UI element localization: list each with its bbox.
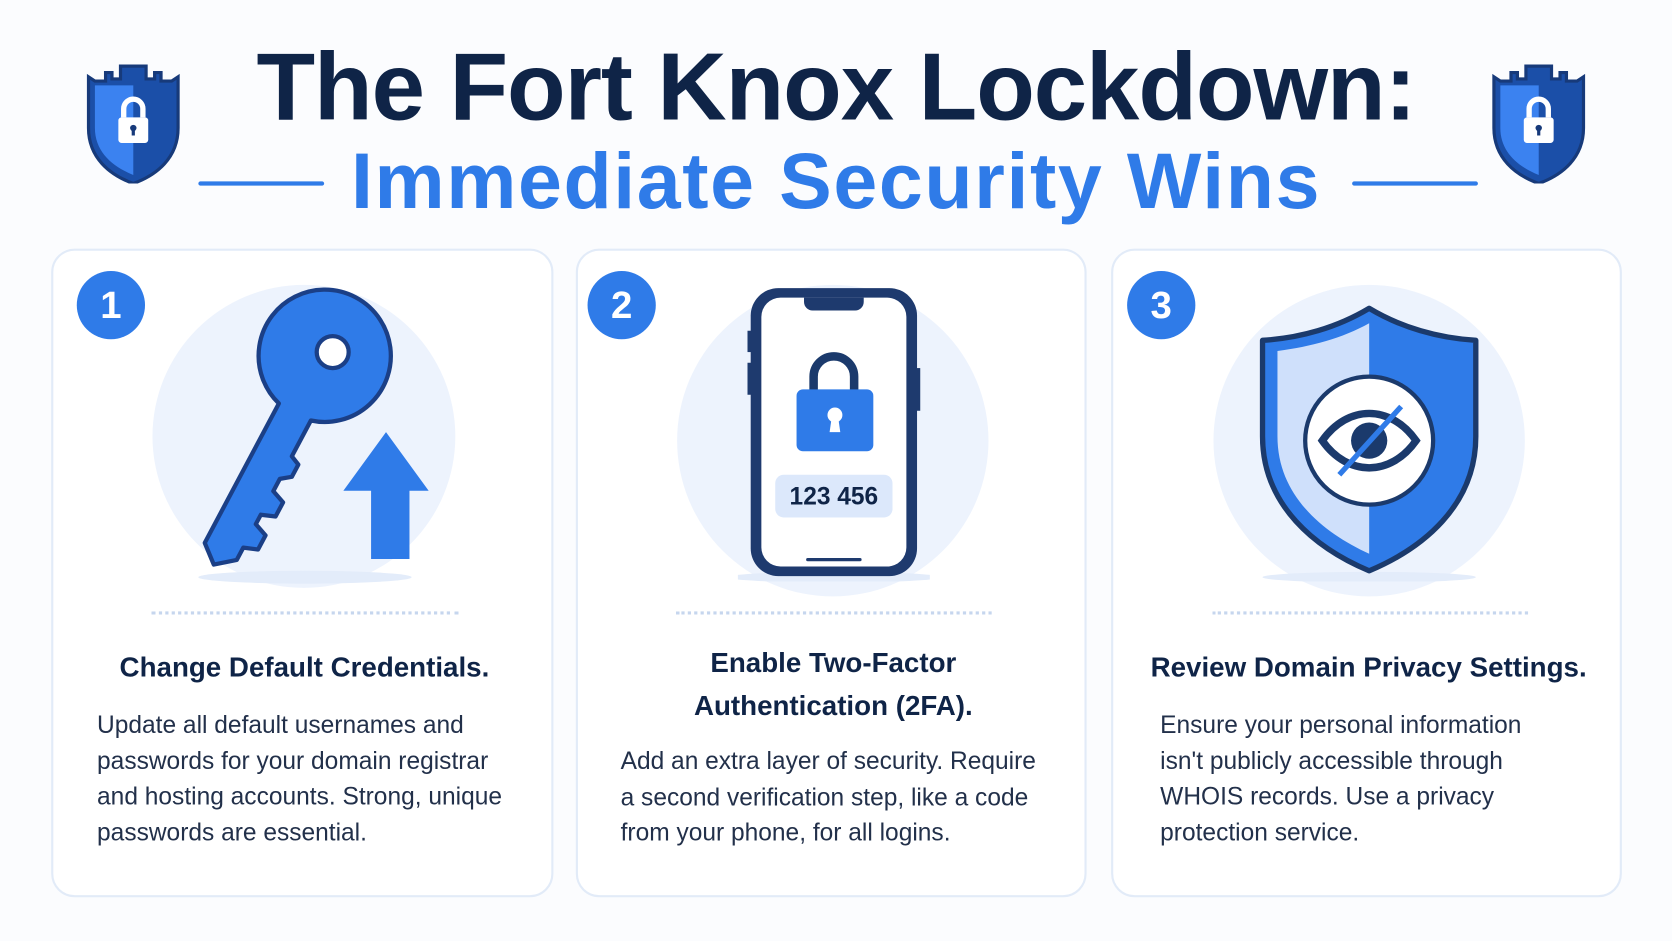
number badge 1: [77, 271, 145, 339]
number badge 2: [588, 271, 656, 339]
heading: Review Domain Privacy Settings.: [1151, 651, 1587, 683]
icon: shield right: [1492, 64, 1586, 184]
body text: and hosting accounts. Strong, unique: [97, 782, 502, 810]
subtitle rule right: [1352, 181, 1478, 186]
subtitle rule left: [198, 181, 324, 186]
body text: from your phone, for all logins.: [621, 819, 951, 846]
icon: phone with lock: [738, 288, 930, 582]
icon: shield with hidden eye: [1260, 306, 1478, 582]
number badge 3: 3: [1151, 283, 1172, 326]
body text: [1160, 711, 1521, 846]
icon background circle: [677, 285, 988, 596]
divider dots: [151, 611, 459, 615]
body text: Update all default usernames and: [97, 711, 464, 738]
number badge 2: 2: [611, 283, 632, 326]
body text: [97, 711, 502, 846]
heading: Change Default Credentials.: [120, 651, 489, 683]
number badge 1: 1: [100, 283, 122, 326]
number badge 3: [1127, 271, 1195, 339]
body text: WHOIS records. Use a privacy: [1160, 782, 1494, 810]
icon background circle: [152, 285, 455, 588]
body text: Add an extra layer of security. Require: [621, 747, 1036, 775]
divider dots: [1212, 611, 1528, 615]
body text: Ensure your personal information: [1160, 711, 1521, 738]
title: The Fort Knox Lockdown:: [256, 34, 1416, 141]
heading: [694, 647, 973, 721]
body text: passwords for your domain registrar: [97, 746, 488, 774]
panel: 2FA: [576, 249, 1087, 897]
body text: protection service.: [1160, 818, 1359, 846]
heading: Authentication (2FA).: [694, 689, 973, 721]
heading: Enable Two-Factor: [710, 647, 956, 679]
body text: passwords are essential.: [97, 818, 367, 846]
body text: a second verification step, like a code: [621, 783, 1028, 810]
body text: [620, 747, 1036, 846]
subtitle: Immediate Security Wins: [351, 137, 1321, 225]
icon: phone with lock: 123 456: [790, 484, 878, 511]
icon: key with arrow: [198, 288, 429, 584]
icon background circle: [1213, 285, 1525, 596]
body text: isn't publicly accessible through: [1160, 746, 1503, 774]
icon: shield left: [86, 64, 180, 184]
panel: domain privacy: [1111, 249, 1622, 897]
divider dots: [676, 611, 992, 615]
panel: change credentials: [51, 249, 553, 897]
